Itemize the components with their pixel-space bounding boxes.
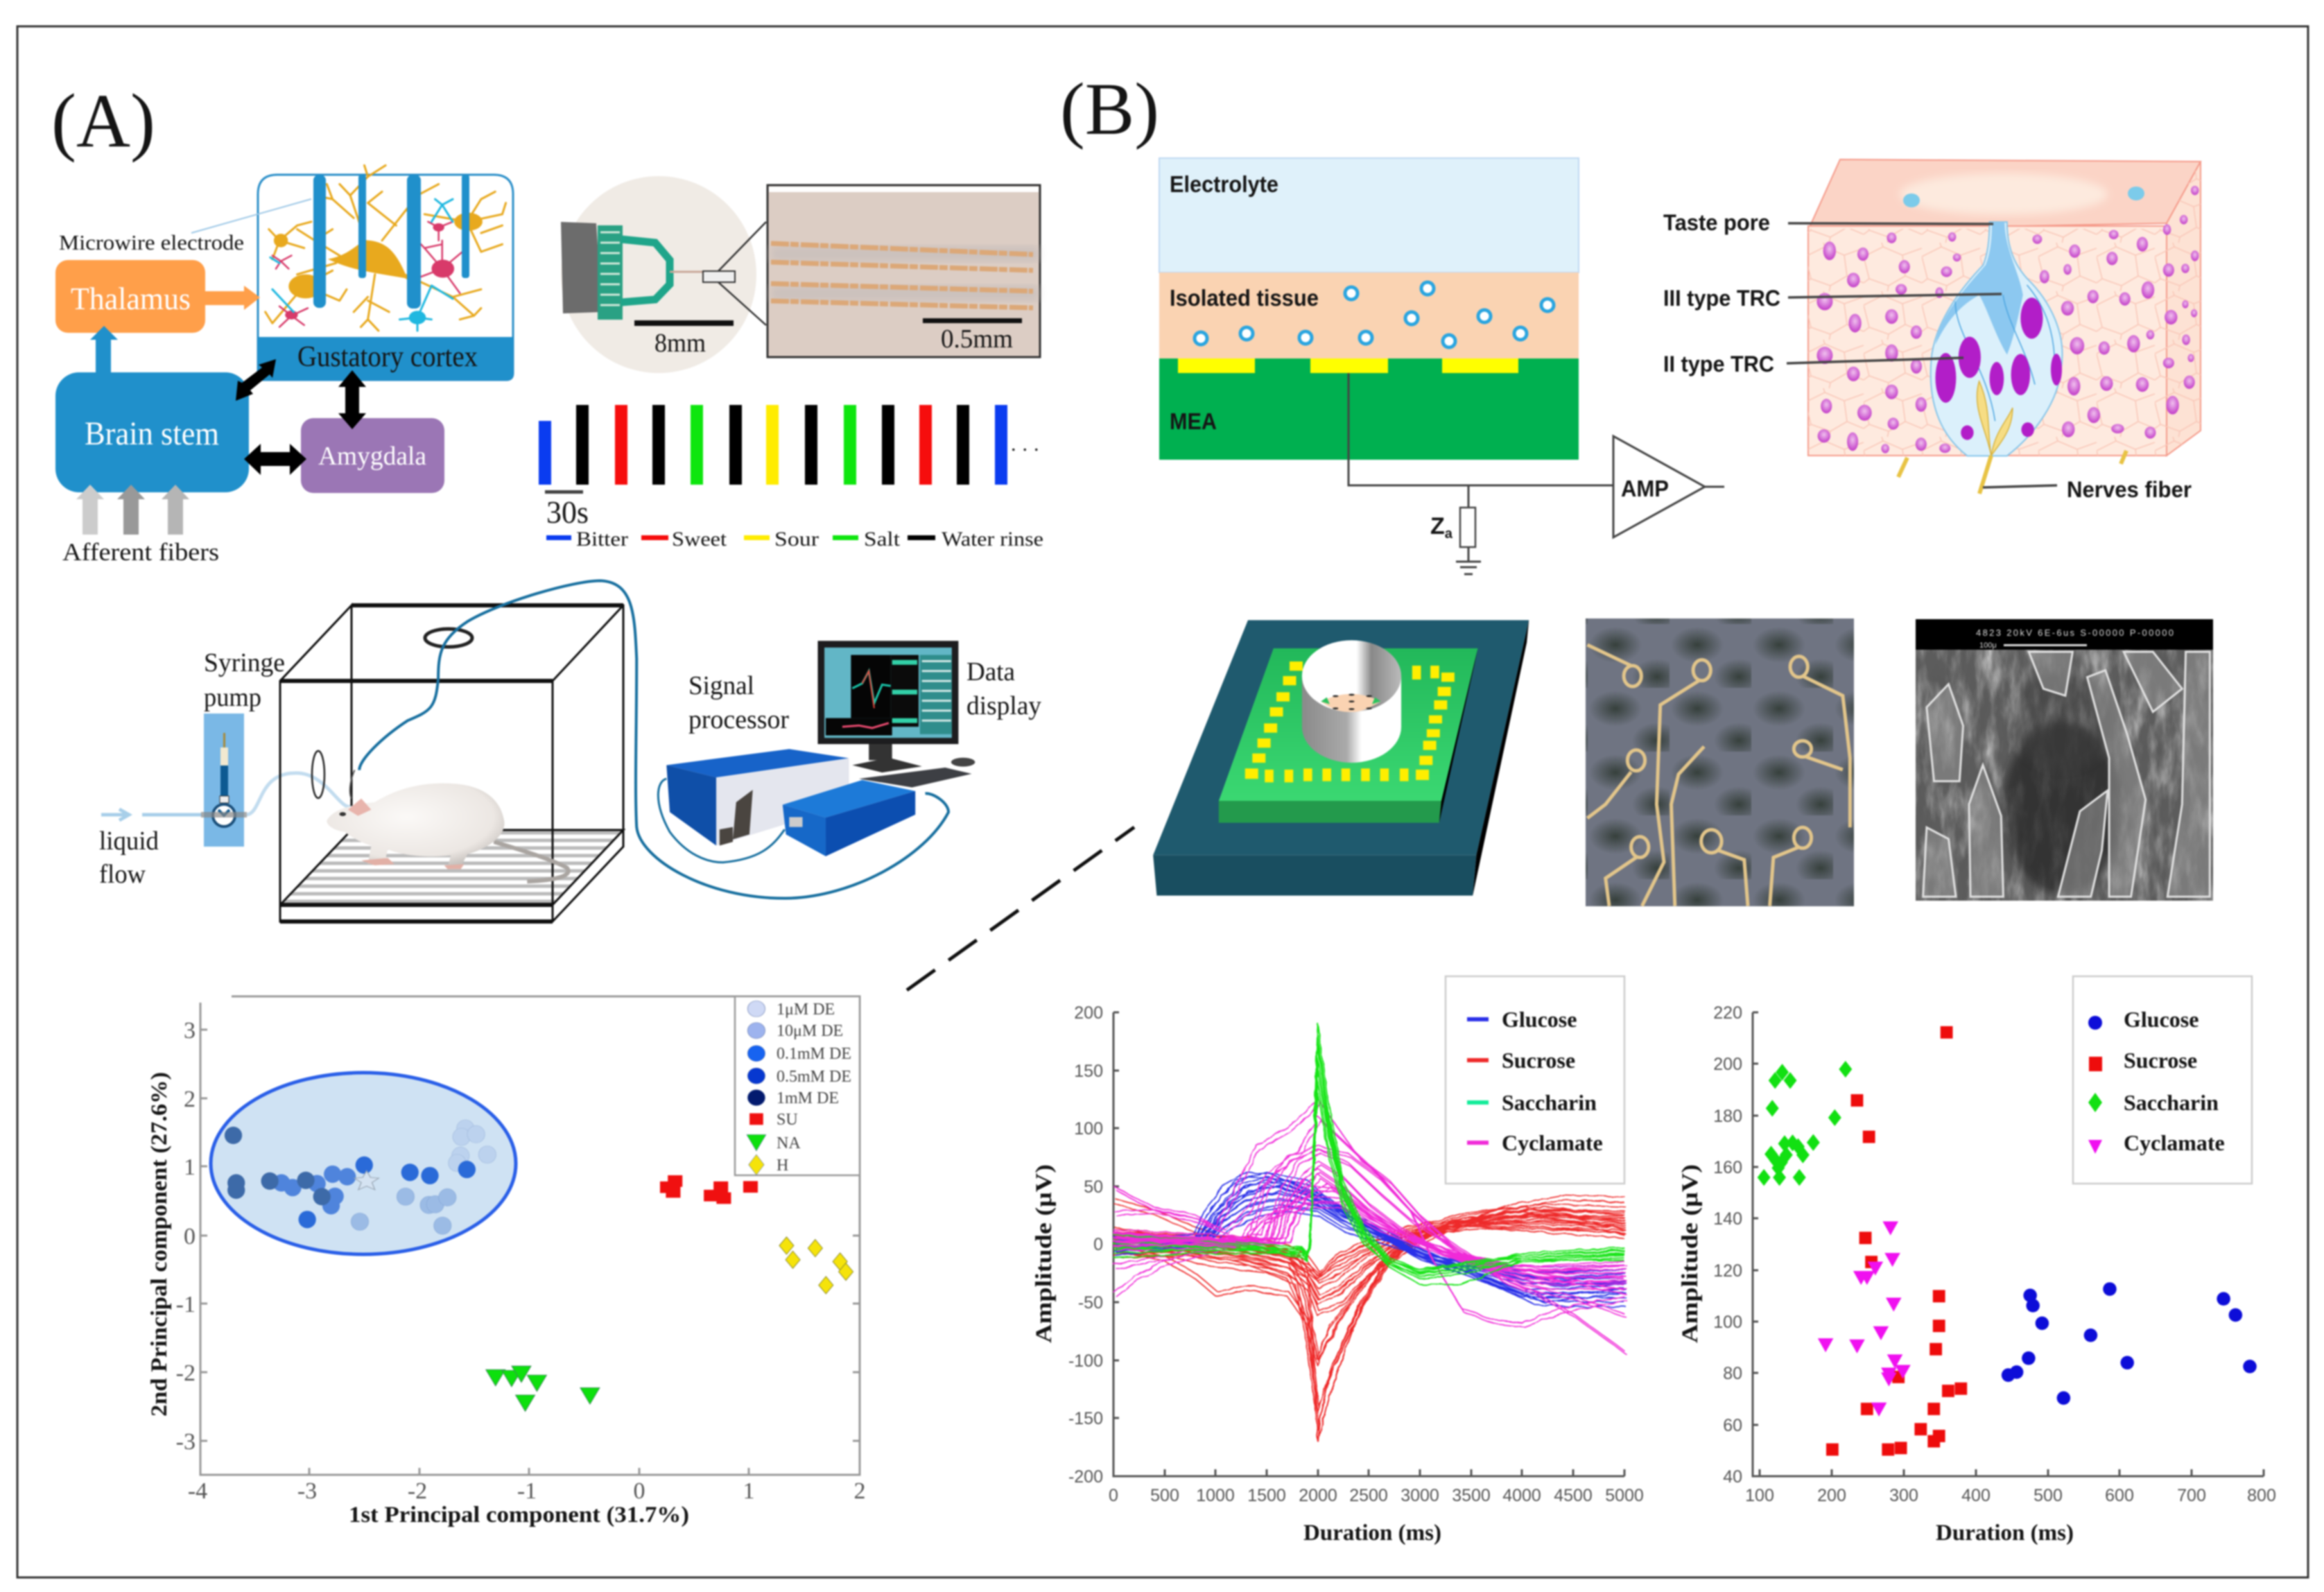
box: thalamus [55, 260, 205, 333]
amplifier: AMP [1621, 476, 1669, 501]
y tick labels: -2 [176, 1360, 196, 1386]
legend: tastants [546, 528, 1043, 551]
photo: magnified microwires [768, 185, 1040, 357]
x tick labels: -1 [517, 1478, 537, 1504]
legend: 0.5mM DE [777, 1068, 851, 1086]
layer: electrolyte: Electrolyte [1170, 171, 1278, 197]
label: syringe pump [204, 648, 285, 712]
chart: PCA scatter [147, 996, 865, 1528]
y tick labels: 220 [1713, 1003, 1742, 1023]
y tick labels: 80 [1723, 1364, 1742, 1383]
legend: Saccharin [2124, 1090, 2219, 1115]
traces: baseline band [1113, 1234, 1236, 1247]
labels: taste bud parts: III type TRC [1663, 286, 1780, 311]
icon: syringe pump [201, 713, 247, 847]
leader lines [1787, 223, 2057, 487]
y tick labels: 1 [184, 1154, 196, 1180]
label: data display [966, 657, 1041, 720]
panel: gustatory pathway diagram [55, 165, 513, 566]
label: signal processor: Signal [688, 671, 754, 700]
legend [735, 996, 860, 1175]
x tick labels: -4 [188, 1478, 207, 1504]
panel: taste bud illustration [1663, 159, 2201, 502]
y tick labels: -200 [1068, 1467, 1103, 1487]
panel: MEA chip and photos [1153, 618, 2213, 906]
labels: taste bud parts: Nerves fiber [2067, 477, 2192, 502]
chart: amplitude vs duration scatter [1678, 976, 2276, 1546]
y tick labels [1713, 1003, 1742, 1487]
x tick labels: 1 [743, 1478, 754, 1504]
y tick labels: 150 [1074, 1062, 1103, 1081]
x tick labels: 500 [1150, 1486, 1179, 1505]
x tick labels: -3 [297, 1478, 317, 1504]
arrow: brain stem to cortex [236, 359, 276, 401]
label: data display: display [966, 691, 1041, 720]
y tick labels [176, 1018, 196, 1455]
label: syringe pump: Syringe [204, 648, 285, 677]
icon: monitor and keyboard [817, 641, 975, 788]
points: saccharin [1758, 1062, 1851, 1184]
layer: electrolyte [1159, 158, 1579, 272]
traces: saccharin [1113, 1023, 1624, 1285]
x tick labels: 200 [1817, 1486, 1846, 1505]
photo: implanted electrode array: 8mm [654, 329, 706, 358]
x tick labels: 3000 [1401, 1486, 1439, 1505]
x tick labels: -2 [408, 1478, 427, 1504]
legend: tastants: Water rinse [942, 528, 1043, 551]
label: data display: Data [966, 657, 1015, 686]
zoom lines [718, 222, 766, 325]
label: liquid flow [99, 827, 159, 889]
legend: tastants: Bitter [576, 528, 628, 551]
x tick labels: 2500 [1349, 1486, 1388, 1505]
tube: syringe to rat [247, 773, 352, 815]
x tick labels: 1500 [1247, 1486, 1286, 1505]
arrow: liquid flow [101, 809, 202, 820]
illustration: MEA chip [1153, 620, 1529, 896]
x tick labels: 0 [1109, 1486, 1118, 1505]
cells: tissue cells [1195, 282, 1554, 347]
label: microwire electrode: Microwire electrode [59, 230, 244, 254]
labels: taste bud parts: II type TRC [1663, 352, 1774, 377]
y axis title: Amplitude (μV) [1678, 1164, 1703, 1343]
chart: spike waveforms [1032, 976, 1644, 1546]
icon: microwire electrodes [191, 175, 469, 309]
legend: tastants: Salt [864, 528, 901, 551]
x axis title: 1st Principal component (31.7%) [349, 1503, 689, 1528]
y tick labels: 200 [1074, 1003, 1103, 1023]
label: syringe pump: pump [204, 683, 261, 712]
x tick labels: 5000 [1605, 1486, 1644, 1505]
scale: 30 seconds: 30s [546, 494, 589, 530]
legend: NA [777, 1134, 801, 1152]
y tick labels: 3 [184, 1018, 196, 1044]
x tick labels [188, 1478, 865, 1504]
connector: dashed line [907, 827, 1134, 990]
circuit: impedance Za: Z [1430, 513, 1445, 539]
cable: headstage to processor [350, 580, 948, 899]
axes [1113, 1012, 1624, 1476]
y tick labels: 60 [1723, 1416, 1742, 1435]
chart: stimulus bars: ... [1011, 433, 1046, 456]
legend: Saccharin [1502, 1090, 1597, 1115]
box: amygdala [301, 418, 444, 493]
box: brain stem [55, 372, 249, 492]
circuit: impedance Za: a [1445, 526, 1453, 542]
x tick labels: 600 [2105, 1486, 2134, 1505]
box: thalamus: Thalamus [71, 281, 191, 316]
x tick labels: 2 [854, 1478, 865, 1504]
y tick labels: 40 [1723, 1467, 1742, 1487]
labels: taste bud parts [1663, 210, 2192, 502]
arrow: thalamus to cortex [205, 286, 260, 310]
x tick labels: 300 [1889, 1486, 1918, 1505]
photo: SEM of taste epithelium: 100μ [1979, 641, 1997, 650]
traces: glucose [1113, 1172, 1627, 1307]
legend: 10μM DE [777, 1022, 843, 1040]
x tick labels [1109, 1486, 1644, 1505]
illustration: chamber box [280, 605, 623, 922]
x tick labels: 2000 [1299, 1486, 1337, 1505]
rim: tube ring [312, 751, 324, 798]
x tick labels: 1000 [1196, 1486, 1235, 1505]
circuit: signal wiring [1349, 373, 1724, 574]
heading: panel A label: (A) [51, 78, 155, 163]
y tick labels: 160 [1713, 1158, 1742, 1177]
labels: taste bud parts: Taste pore [1663, 210, 1770, 235]
y tick labels: -3 [176, 1429, 196, 1455]
rim: tether ring [425, 629, 472, 647]
panel: behaving rat recording setup [99, 580, 1041, 922]
illustration: neurons and electrodes [266, 165, 506, 331]
layer: MEA substrate: MEA [1170, 408, 1217, 434]
layer: isolated tissue: Isolated tissue [1170, 285, 1319, 311]
axes [200, 996, 860, 1475]
label: signal processor: processor [688, 705, 789, 734]
label: signal processor [688, 671, 789, 734]
chart: stimulus bars [539, 405, 1046, 485]
legend: Glucose [1502, 1007, 1577, 1032]
points: DE concentrations [225, 1120, 496, 1234]
y tick labels: -150 [1068, 1409, 1103, 1428]
legend: 1mM DE [777, 1089, 839, 1107]
amplifier [1613, 436, 1705, 537]
panel: MEA recording schematic [1159, 158, 1724, 574]
y tick labels: 140 [1713, 1209, 1742, 1229]
cells: epithelial nuclei [1816, 186, 2199, 453]
legend: 1μM DE [777, 1001, 835, 1019]
x tick labels: 700 [2177, 1486, 2206, 1505]
legend: SU [777, 1111, 798, 1129]
icon: signal processor units [666, 749, 915, 856]
arrow: brain stem to amygdala [244, 444, 306, 475]
label: liquid flow: liquid [99, 827, 159, 856]
photo: gold electrode array [1586, 618, 1854, 906]
y tick labels: 100 [1713, 1313, 1742, 1332]
y tick labels: 0 [1093, 1235, 1103, 1254]
points: SU [661, 1175, 757, 1204]
y axis title: 2nd Principal component (27.6%) [147, 1072, 172, 1417]
x tick labels: 0 [634, 1478, 645, 1504]
y tick labels [1068, 1003, 1103, 1487]
region: DE cluster ellipse [211, 1073, 516, 1254]
legend: Sucrose [1502, 1048, 1575, 1073]
arrow: cortex to amygdala [338, 370, 366, 429]
box: gustatory cortex: Gustatory cortex [297, 341, 478, 373]
legend: Sucrose [2124, 1048, 2197, 1073]
legend [1446, 976, 1624, 1184]
y axis title: Amplitude (μV) [1032, 1164, 1057, 1343]
y tick labels: 50 [1084, 1177, 1103, 1197]
illustration: rat [327, 784, 569, 881]
x axis title: Duration (ms) [1303, 1521, 1441, 1546]
legend: H [777, 1157, 788, 1175]
x tick labels: 800 [2247, 1486, 2276, 1505]
photo: SEM of taste epithelium [1916, 619, 2213, 901]
y tick labels: 0 [184, 1224, 196, 1249]
electrodes: yellow pads [1178, 358, 1518, 373]
panel: electrode photos [561, 176, 1040, 373]
y tick labels: -50 [1078, 1293, 1103, 1313]
y tick labels: 200 [1713, 1055, 1742, 1074]
x tick labels: 100 [1745, 1486, 1774, 1505]
x tick labels: 400 [1961, 1486, 1991, 1505]
illustration: chamber floor grid [263, 833, 638, 901]
photo: implanted electrode array [561, 176, 756, 373]
points: H [779, 1237, 853, 1294]
y tick labels: 180 [1713, 1107, 1742, 1126]
label: afferent fibers: Afferent fibers [62, 538, 219, 566]
points: NA [486, 1366, 600, 1411]
panel: taste stimulation timeline [539, 405, 1046, 551]
box: gustatory cortex [258, 175, 513, 380]
layer: isolated tissue [1159, 272, 1579, 358]
y tick labels: 2 [184, 1087, 196, 1112]
legend [2073, 976, 2252, 1184]
y tick labels: -1 [176, 1292, 196, 1317]
axes [1753, 1012, 2264, 1476]
y tick labels: -100 [1068, 1351, 1103, 1371]
points: glucose [2002, 1282, 2257, 1405]
legend: 0.1mM DE [777, 1045, 851, 1063]
legend: Cyclamate [2124, 1130, 2225, 1155]
circuit: impedance Za [1430, 508, 1475, 547]
x tick labels [1745, 1486, 2276, 1505]
box: amygdala: Amygdala [318, 442, 426, 471]
box: brain stem: Brain stem [85, 415, 219, 452]
arrows: afferent fibers [76, 485, 189, 535]
x tick labels: 4500 [1554, 1486, 1593, 1505]
taste bud [1931, 222, 2062, 456]
legend: tastants: Sour [774, 528, 819, 551]
y tick labels: 120 [1713, 1261, 1742, 1281]
nerves [1898, 451, 2126, 494]
x tick labels: 3500 [1452, 1486, 1491, 1505]
tissue block [1808, 159, 2201, 456]
layer: MEA substrate [1159, 358, 1579, 460]
legend: tastants: Sweet [672, 528, 727, 551]
x axis title: Duration (ms) [1936, 1521, 2074, 1546]
heading: panel B label: (B) [1060, 69, 1159, 150]
legend: Glucose [2124, 1007, 2199, 1032]
points: sucrose [1827, 1027, 1966, 1455]
label: liquid flow: flow [99, 860, 146, 889]
photo: SEM of taste epithelium: 4823 20kV 6E-6us S-00000 P-00000 [1976, 628, 2174, 638]
x tick labels: 500 [2034, 1486, 2063, 1505]
points: cyclamate [1819, 1222, 1910, 1416]
y tick labels: 100 [1074, 1119, 1103, 1139]
arrow: brain stem to thalamus [90, 326, 118, 372]
traces: sucrose [1113, 1195, 1625, 1441]
photo: magnified microwires: 0.5mm [941, 325, 1013, 354]
x tick labels: 4000 [1502, 1486, 1541, 1505]
legend: Cyclamate [1502, 1130, 1603, 1155]
traces [1113, 1023, 1627, 1441]
traces: cyclamate [1113, 1099, 1627, 1355]
